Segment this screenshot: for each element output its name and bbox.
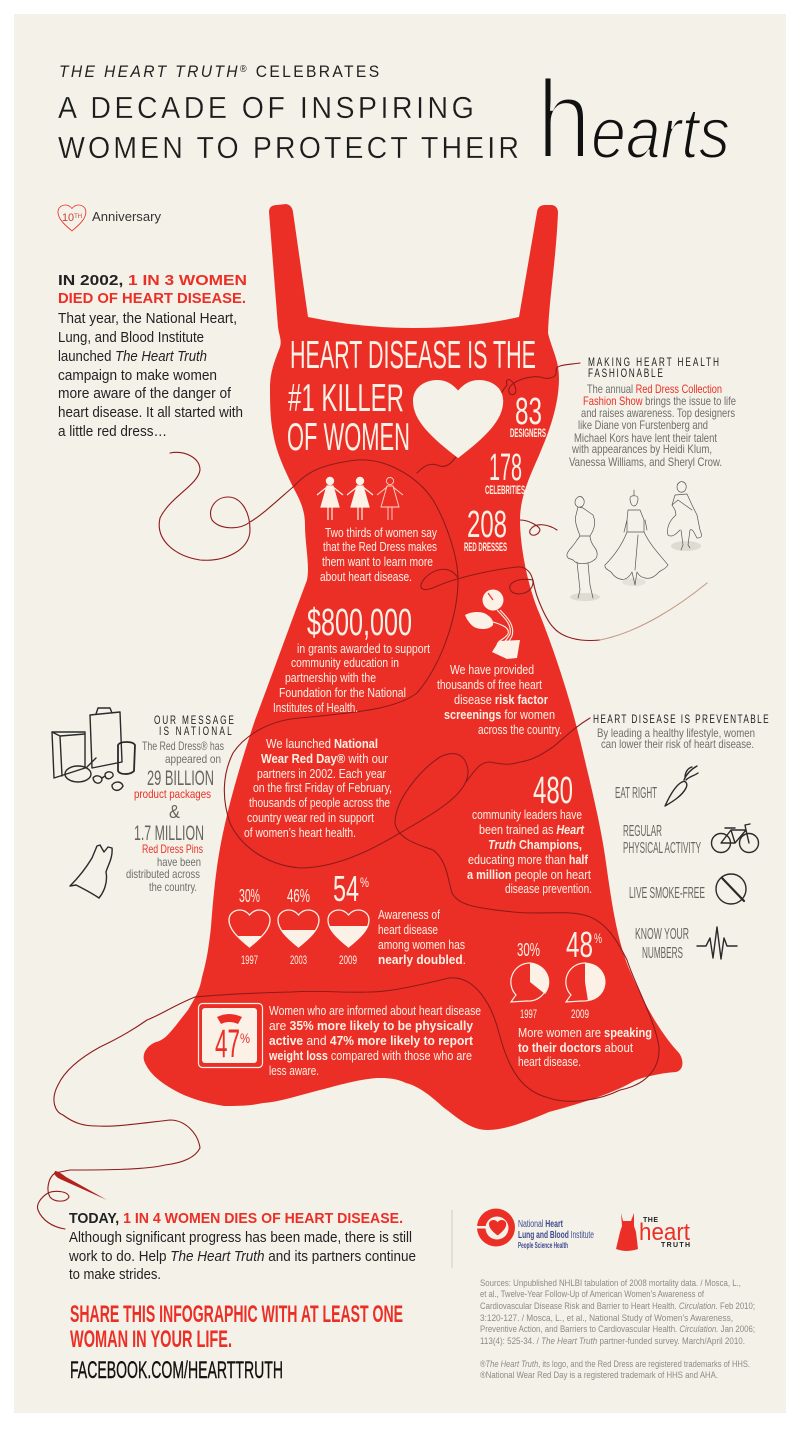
sources: Sources: Unpublished NHLBI tabulation of 2008 mortality data. / Mosca, L.,: [480, 1278, 741, 1289]
stat: $800,000 grants: $800,000: [307, 602, 412, 644]
panel: making heart health fashionable: Vanessa Williams, and Sheryl Crow.: [569, 455, 722, 469]
panel: our message is national: [126, 715, 234, 894]
logo: NHLBI: [475, 1208, 594, 1250]
text: speaking to doctors: More women are speaking: [518, 1025, 652, 1040]
logo: The Heart Truth: THE: [643, 1217, 658, 1224]
text: speaking to doctors: to their doctors about: [518, 1040, 633, 1055]
chart: speech bubble pies: 30%: [517, 940, 540, 960]
closing text: today: to make strides.: [69, 1266, 161, 1283]
stat: 480 community leaders: a million people on heart: [467, 867, 591, 882]
item: know your numbers: [635, 926, 737, 962]
stat: designers, celebrities, red dresses: RED DRESSES: [464, 542, 507, 554]
intro text block: [58, 272, 247, 440]
sources: [480, 1278, 755, 1381]
text: risk factor screenings: [437, 662, 562, 737]
closing text: today: Although significant progress has been made, there is still: [69, 1229, 412, 1246]
call to action: WOMAN IN YOUR LIFE.: [70, 1326, 232, 1353]
panel: making heart health fashionable: Michael Kors have lent their talent: [574, 431, 718, 445]
chart: awareness hearts: 54: [333, 868, 359, 909]
panel: making heart health fashionable: FASHIONABLE: [588, 368, 663, 380]
text: National Wear Red Day: country wear red in support: [247, 810, 374, 825]
logo: The Heart Truth: [616, 1213, 690, 1251]
panel: heart disease is preventable: [593, 714, 769, 751]
text: National Wear Red Day: [244, 736, 392, 840]
stat: 480 community leaders: 480: [533, 770, 573, 812]
text: risk factor screenings: We have provided: [450, 662, 534, 677]
panel: making heart health fashionable: The annual Red Dress Collection: [587, 382, 722, 396]
text: informed women: Women who are informed about heart disease: [269, 1003, 481, 1018]
icon: fashion model sketches: [567, 482, 701, 601]
stat: designers, celebrities, red dresses: 208: [467, 504, 507, 546]
text: two thirds of women: them want to learn more: [322, 554, 433, 569]
chart: awareness hearts: [229, 868, 369, 967]
text: National Wear Red Day: We launched National: [266, 736, 378, 751]
text: awareness doubled: among women has: [378, 937, 465, 952]
item: live smoke-free: [629, 874, 746, 904]
panel: our message is national: &: [169, 802, 180, 822]
text: two thirds of women: Two thirds of women say: [325, 525, 437, 540]
intro text block: Lung, and Blood Institute: [58, 329, 204, 346]
text: speaking to doctors: [518, 1025, 652, 1069]
stat: 480 community leaders: been trained as Heart: [479, 822, 585, 837]
panel: our message is national: OUR MESSAGE: [154, 715, 234, 727]
call to action: [70, 1301, 403, 1384]
title: hearts: [537, 57, 730, 182]
logo: NHLBI: National Heart: [518, 1219, 563, 1230]
text: awareness doubled: nearly doubled.: [378, 952, 466, 967]
text: National Wear Red Day: partners in 2002. Each year: [257, 766, 387, 781]
headline in dress: OF WOMEN: [287, 416, 410, 459]
chart: awareness hearts: 46%: [287, 886, 310, 906]
closing text: today: TODAY, 1 IN 4 WOMEN DIES OF HEART DISEASE.: [69, 1210, 403, 1227]
headline in dress: [287, 334, 536, 459]
needle: [37, 1171, 107, 1229]
panel: our message is national: have been: [157, 855, 201, 869]
panel: making heart health fashionable: and raises awareness. Top designers: [581, 406, 735, 420]
closing text: today: work to do. Help The Heart Truth and its partners continue: [68, 1248, 416, 1265]
text: informed women: are 35% more likely to be physically: [269, 1018, 474, 1033]
headline in dress: #1 KILLER: [288, 377, 404, 420]
stat: $800,000 grants: in grants awarded to support: [297, 641, 430, 656]
chart: speech bubble pies: [511, 924, 606, 1021]
call to action: FACEBOOK.COM/HEARTTRUTH: [70, 1357, 283, 1384]
logo: The Heart Truth: heart: [639, 1219, 690, 1246]
intro text block: campaign to make women: [58, 367, 217, 384]
item: eat right: [615, 766, 698, 806]
stat: $800,000 grants: Institutes of Health.: [273, 700, 358, 715]
intro text block: a little red dress…: [58, 423, 167, 440]
text: informed women: weight loss compared with those who are: [268, 1048, 472, 1063]
text: informed women: less aware.: [269, 1063, 319, 1078]
text: awareness doubled: [378, 907, 466, 967]
sources: et al., Twelve-Year Follow-Up of American Women’s Awareness of: [480, 1289, 704, 1300]
item: eat right: EAT RIGHT: [615, 785, 657, 802]
chart: awareness hearts: 2003: [290, 953, 307, 967]
stat: designers, celebrities, red dresses: 83: [515, 391, 542, 433]
sources: ®The Heart Truth, its logo, and the Red Dress are registered trademarks of HHS.: [480, 1359, 750, 1370]
text: two thirds of women: that the Red Dress makes: [323, 539, 437, 554]
sources: Preventive Action, and Barriers to Cardiovascular Health. Circulation. Jan 2006;: [480, 1324, 755, 1335]
icon: scale 47%: 47: [215, 1022, 240, 1066]
title: CELEBRATES: [249, 62, 379, 81]
anniversary badge: [58, 205, 161, 231]
text: National Wear Red Day: Wear Red Day® with our: [261, 751, 389, 766]
text: informed women: active and 47% more likely to report: [269, 1033, 474, 1048]
intro text block: heart disease. It all started with: [58, 404, 243, 421]
chart: awareness hearts: %: [360, 874, 369, 890]
chart: awareness hearts: 2009: [339, 953, 357, 967]
panel: heart disease is preventable: HEART DISEASE IS PREVENTABLE: [593, 714, 769, 726]
item: regular physical activity: PHYSICAL ACTIVITY: [623, 840, 701, 857]
text: risk factor screenings: screenings for women: [444, 707, 555, 722]
panel: our message is national: the country.: [149, 880, 197, 894]
title: WOMEN TO PROTECT THEIR: [58, 131, 519, 165]
stat: 480 community leaders: Truth Champions,: [488, 837, 582, 852]
text: National Wear Red Day: of women’s heart health.: [244, 825, 356, 840]
sources: ®National Wear Red Day is a registered trademark of HHS and AHA.: [480, 1370, 718, 1381]
red dress silhouette: [144, 204, 682, 1130]
stat: 480 community leaders: community leaders have: [472, 807, 582, 822]
text: risk factor screenings: across the country.: [478, 722, 562, 737]
stat: 480 community leaders: disease prevention.: [505, 881, 592, 896]
anniversary badge: 10: [62, 212, 74, 224]
intro text block: launched The Heart Truth: [58, 348, 207, 365]
icon: blood pressure cuff: [465, 590, 520, 659]
anniversary badge: Anniversary: [92, 209, 161, 224]
stat: $800,000 grants: [273, 602, 430, 715]
title: A DECADE OF INSPIRING: [58, 91, 474, 125]
panel: our message is national: The Red Dress® has: [142, 739, 224, 753]
intro text block: IN 2002, 1 IN 3 WOMEN: [58, 272, 247, 289]
call to action: SHARE THIS INFOGRAPHIC WITH AT LEAST ONE: [70, 1301, 403, 1328]
panel: our message is national: Red Dress Pins: [142, 842, 203, 856]
panel: our message is national: appeared on: [165, 752, 221, 766]
title: ®: [240, 64, 247, 75]
panel: making heart health fashionable: with appearances by Heidi Klum,: [571, 442, 712, 456]
stat: 480 community leaders: [467, 770, 592, 896]
icon: scale 47%: [198, 1004, 262, 1068]
text: awareness doubled: Awareness of: [378, 907, 440, 922]
text: two thirds of women: [320, 525, 437, 584]
chart: speech bubble pies: 2009: [571, 1007, 589, 1021]
intro text block: more aware of the danger of: [58, 385, 232, 402]
text: two thirds of women: about heart disease.: [320, 569, 412, 584]
anniversary badge: TH: [74, 214, 82, 220]
stat: $800,000 grants: community education in: [291, 655, 399, 670]
icon: red dress pin sketch: [70, 845, 112, 898]
panel: our message is national: distributed across: [126, 867, 200, 881]
chart: awareness hearts: 30%: [239, 886, 260, 906]
text: National Wear Red Day: on the first Friday of February,: [253, 780, 392, 795]
panel: our message is national: 1.7 MILLION: [134, 822, 204, 845]
text: awareness doubled: heart disease: [378, 922, 438, 937]
icon: product packages sketch: [52, 708, 135, 790]
item: know your numbers: NUMBERS: [642, 945, 683, 962]
chart: speech bubble pies: 48: [566, 924, 593, 965]
panel: making heart health fashionable: [569, 357, 736, 469]
sources: Cardiovascular Disease Risk and Barrier to Heart Health. Circulation. Feb 2010;: [480, 1301, 755, 1312]
sources: 113(4): 525-34. / The Heart Truth partner-funded survey. March/April 2010.: [480, 1336, 745, 1347]
icon: three women: [317, 477, 403, 520]
headline in dress: HEART DISEASE IS THE: [290, 334, 536, 377]
stat: designers, celebrities, red dresses: DESIGNERS: [510, 428, 546, 440]
text: informed women: [268, 1003, 481, 1078]
intro text block: DIED OF HEART DISEASE.: [58, 290, 246, 307]
panel: making heart health fashionable: Fashion Show brings the issue to life: [583, 394, 736, 408]
panel: our message is national: product packages: [134, 787, 211, 801]
panel: making heart health fashionable: like Diane von Furstenberg and: [578, 418, 708, 432]
icon: large heart: [413, 380, 503, 458]
stat: $800,000 grants: partnership with the: [285, 670, 376, 685]
icon: scale 47%: %: [240, 1030, 250, 1046]
stat: designers, celebrities, red dresses: CELEBRITIES: [485, 485, 525, 497]
item: regular physical activity: REGULAR: [623, 823, 662, 840]
panel: our message is national: IS NATIONAL: [159, 726, 232, 738]
panel: making heart health fashionable: MAKING HEART HEALTH: [588, 357, 719, 369]
logo: The Heart Truth: TRUTH: [661, 1242, 690, 1249]
stat: 480 community leaders: educating more than half: [468, 852, 589, 867]
text: speaking to doctors: heart disease.: [518, 1054, 581, 1069]
intro text block: That year, the National Heart,: [58, 310, 237, 327]
panel: heart disease is preventable: can lower their risk of heart disease.: [601, 737, 754, 751]
stat: designers, celebrities, red dresses: 178: [489, 447, 522, 489]
item: regular physical activity: [623, 823, 758, 857]
chart: awareness hearts: 1997: [241, 953, 258, 967]
text: risk factor screenings: thousands of free heart: [437, 677, 542, 692]
item: live smoke-free: LIVE SMOKE-FREE: [629, 885, 705, 902]
thread running through the dress: [54, 363, 707, 1173]
chart: speech bubble pies: %: [594, 930, 602, 946]
item: know your numbers: KNOW YOUR: [635, 926, 689, 943]
sources: 3:120-127. / Mosca, L., et al., National Study of Women’s Awareness,: [480, 1313, 733, 1324]
logo: NHLBI: Lung and Blood Institute: [518, 1230, 594, 1241]
title: THE HEART TRUTH: [59, 62, 238, 81]
closing text: today: [68, 1210, 416, 1283]
panel: heart disease is preventable: By leading a healthy lifestyle, women: [597, 726, 755, 740]
text: National Wear Red Day: thousands of people across the: [249, 795, 390, 810]
logo: NHLBI: People Science Health: [518, 1241, 568, 1250]
title: [58, 57, 730, 182]
text: risk factor screenings: disease risk factor: [454, 692, 548, 707]
stat: designers, celebrities, red dresses: [464, 391, 546, 554]
panel: our message is national: 29 BILLION: [147, 767, 214, 790]
chart: speech bubble pies: 1997: [520, 1007, 537, 1021]
stat: $800,000 grants: Foundation for the National: [279, 685, 406, 700]
